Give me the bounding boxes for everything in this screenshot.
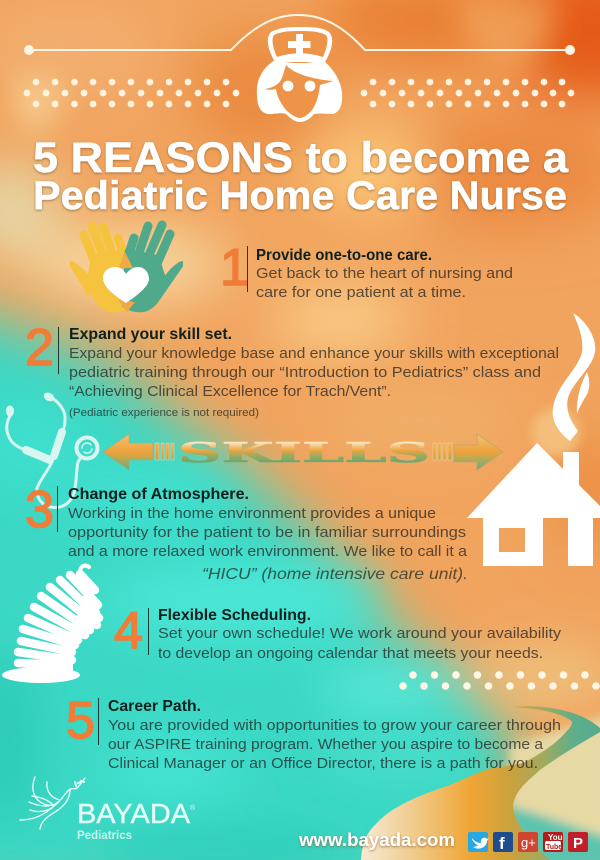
- icon: youtube: You: [548, 833, 563, 842]
- reason 3: opportunity for the patient to be in familiar surroundings: [68, 524, 466, 541]
- reason 3: and a more relaxed work environment. We like to call it a: [68, 543, 468, 560]
- icon: youtube: [543, 832, 563, 852]
- green hand: [123, 225, 182, 311]
- icon: nurse: [257, 27, 342, 122]
- word: skills: SKILLS: [178, 438, 430, 469]
- reason 1: care for one patient at a time.: [256, 284, 466, 301]
- dot band: header left: [24, 79, 239, 107]
- reason 5: 5: [66, 692, 95, 750]
- title: 5 REASONS to become a: [33, 134, 569, 182]
- icon: twitter: [468, 832, 489, 852]
- heart: [103, 267, 149, 303]
- icon: house with smoke: [467, 313, 600, 566]
- logo: wordmark: BAYADA: [77, 798, 190, 829]
- reason 3: “HICU” (home intensive care unit).: [202, 566, 468, 583]
- reason 1: Provide one-to-one care.: [256, 247, 432, 264]
- yellow hand: [71, 226, 133, 311]
- reason 3: Change of Atmosphere.: [68, 486, 249, 503]
- reason 1: Get back to the heart of nursing and: [256, 265, 513, 282]
- reason 4: to develop an ongoing calendar that meets your needs.: [158, 645, 543, 662]
- dot band: header right: [361, 79, 574, 107]
- reason 2: pediatric training through our “Introduction to Pediatrics” class and: [69, 364, 541, 381]
- reason 3: Working in the home environment provides a unique: [68, 505, 436, 522]
- title: Pediatric Home Care Nurse: [33, 174, 567, 218]
- smoke: [553, 313, 595, 441]
- icon: pinterest: P: [573, 835, 583, 852]
- icon: hands with heart: [71, 225, 182, 312]
- reason 4: 4: [114, 602, 143, 660]
- reason 5: our ASPIRE training program. Whether you aspire to become a: [108, 736, 544, 753]
- teal pool bottom right: [508, 806, 600, 860]
- left arrow: [103, 434, 153, 470]
- logo: wordmark: ®: [190, 804, 196, 812]
- logo: wordmark: Pediatrics: [77, 830, 132, 842]
- icon: youtube: Tube: [546, 844, 562, 851]
- reason 2: [25, 319, 559, 419]
- reason 5: Clinical Manager or an Office Director, there is a path for you.: [108, 755, 538, 772]
- header line with arc: [24, 15, 575, 55]
- title: [33, 134, 569, 218]
- reason 4: [114, 602, 561, 662]
- icon: slinky: [2, 566, 102, 683]
- icon: facebook: f: [499, 834, 505, 853]
- icon: stethoscope: [6, 392, 98, 507]
- skills arrow banner: [103, 434, 503, 470]
- overlap: [118, 252, 135, 312]
- social icons: [468, 832, 588, 853]
- cream bank right of road: [510, 715, 600, 845]
- reason 1: [220, 239, 513, 301]
- reason 2: (Pediatric experience is not required): [69, 407, 259, 419]
- reason 3: [25, 481, 468, 583]
- logo: wordmark: [77, 798, 196, 842]
- website url: www.bayada.com: [298, 830, 455, 850]
- reason 5: Career Path.: [108, 698, 201, 715]
- reason 2: Expand your skill set.: [69, 326, 232, 343]
- smoke wisp: [577, 372, 589, 414]
- logo: dove: [20, 777, 85, 829]
- reason 2: Expand your knowledge base and enhance your skills with exceptional: [69, 345, 559, 362]
- reason 2: 2: [25, 319, 54, 377]
- reason 5: You are provided with opportunities to grow your career through: [108, 717, 561, 734]
- bokeh hearts: [459, 0, 553, 76]
- icon: google plus: g+: [521, 835, 536, 850]
- reason 4: Set your own schedule! We work around your availability: [158, 625, 561, 642]
- arrow bars: [155, 443, 452, 460]
- road: career path: [361, 706, 600, 860]
- reason 5: [66, 692, 561, 772]
- right arrow: [454, 434, 503, 470]
- reason 1: 1: [220, 239, 249, 297]
- reason 2: “Achieving Clinical Excellence for Trach/Vent”.: [69, 383, 391, 400]
- reason 4: Flexible Scheduling.: [158, 607, 311, 624]
- reason 3: 3: [25, 481, 54, 539]
- dot band: lower right: [399, 671, 600, 690]
